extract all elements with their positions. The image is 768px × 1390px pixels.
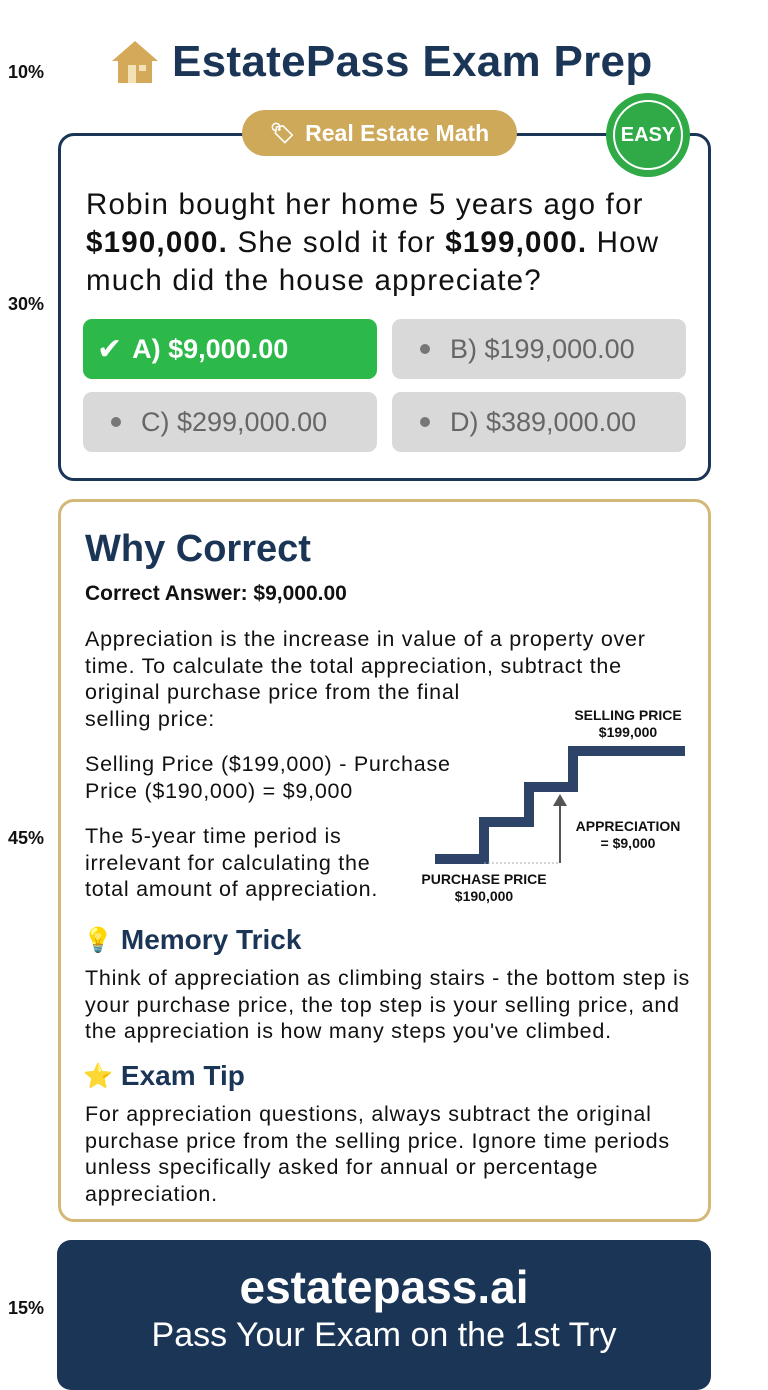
option D: D) $389,000.00: [450, 406, 636, 436]
chart: stairs: PURCHASE PRICE: [421, 871, 547, 887]
option C: [83, 392, 377, 452]
question text: Robin bought her home 5 years ago for: [86, 188, 644, 221]
panel: question: [58, 133, 711, 481]
chart: stairs: $190,000: [455, 888, 513, 904]
tip text: appreciation.: [85, 1182, 218, 1206]
tag: Real Estate Math: Real Estate Math: [305, 120, 489, 146]
time note: The 5-year time period is: [85, 824, 342, 848]
memory text: Think of appreciation as climbing stairs - the bottom step is: [85, 966, 690, 990]
chart: stairs: APPRECIATION: [576, 818, 680, 834]
tag: Real Estate Math: [242, 110, 517, 156]
explanation text: Appreciation is the increase in value of a property over: [85, 627, 646, 651]
option B: [392, 319, 686, 379]
tip text: For appreciation questions, always subtract the original: [85, 1102, 652, 1126]
time note: [85, 824, 378, 901]
chart: stairs: = $9,000: [601, 835, 656, 851]
heading: Memory Trick: 💡: [83, 926, 113, 954]
tag: Real Estate Math: 🏷: [270, 122, 295, 144]
heading: Exam Tip: Exam Tip: [121, 1060, 245, 1091]
label 30%: 30%: [8, 294, 44, 314]
icon: house: [112, 41, 158, 83]
label 10%: 10%: [8, 62, 44, 82]
option A correct: [83, 319, 377, 379]
tip text: unless specifically asked for annual or percentage: [85, 1155, 598, 1179]
chart: stairs: [421, 707, 685, 904]
time note: total amount of appreciation.: [85, 877, 378, 901]
label 15%: 15%: [8, 1298, 44, 1318]
time note: irrelevant for calculating the: [85, 850, 370, 874]
explanation text: [85, 627, 646, 730]
formula text: Selling Price ($199,000) - Purchase: [85, 752, 451, 776]
option A correct: ✔: [97, 332, 122, 366]
option A correct: A) $9,000.00: [132, 334, 288, 364]
heading: Memory Trick: Memory Trick: [121, 924, 301, 955]
footer url: estatepass.ai: [240, 1261, 528, 1313]
correct answer: Correct Answer: $9,000.00: [85, 582, 347, 605]
chart: stairs: SELLING PRICE: [574, 707, 682, 723]
memory text: the appreciation is how many steps you've climbed.: [85, 1019, 612, 1043]
tip text: [85, 1102, 670, 1206]
title: EstatePass Exam Prep: [172, 37, 653, 86]
explanation text: time. To calculate the total appreciation, subtract the: [85, 654, 622, 678]
formula text: Price ($190,000) = $9,000: [85, 778, 353, 802]
memory text: your purchase price, the top step is your selling price, and: [85, 992, 680, 1016]
explanation text: selling price:: [85, 706, 215, 730]
chart: stairs: $199,000: [599, 724, 657, 740]
badge: EASY: [606, 93, 690, 177]
formula text: [85, 752, 451, 802]
footer tagline: Pass Your Exam on the 1st Try: [152, 1316, 616, 1354]
panel: explanation: [58, 499, 711, 1222]
label 45%: 45%: [8, 828, 44, 848]
question text: $190,000. She sold it for $199,000. How: [86, 226, 659, 259]
option D: [392, 392, 686, 452]
explanation text: original purchase price from the final: [85, 680, 460, 704]
footer banner: [57, 1240, 711, 1390]
heading: Exam Tip: ⭐: [83, 1062, 113, 1090]
memory text: [85, 966, 690, 1043]
badge: EASY: EASY: [621, 124, 675, 146]
tip text: purchase price from the selling price. Ignore time periods: [85, 1128, 670, 1152]
question text: much did the house appreciate?: [86, 264, 542, 297]
option C: C) $299,000.00: [141, 406, 327, 436]
heading: Why Correct: Why Correct: [85, 528, 311, 570]
option B: B) $199,000.00: [450, 334, 635, 364]
question text: [86, 188, 659, 297]
